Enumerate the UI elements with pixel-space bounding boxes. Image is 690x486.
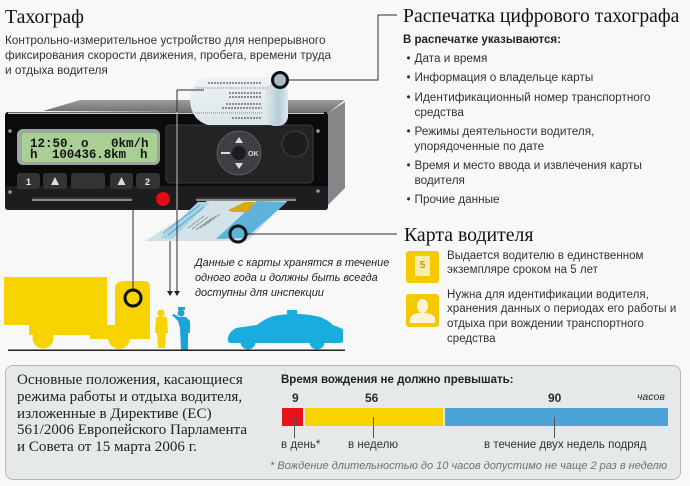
list item: id: [414, 90, 650, 120]
label: per week: в неделю: [348, 439, 398, 451]
panel: printout contents: [403, 34, 650, 206]
callout circles: [125, 72, 288, 306]
police car: [228, 310, 343, 350]
description: tachograph: [5, 33, 332, 77]
regulation text: изложенные в Директиве (ЕС): [17, 406, 212, 422]
heading: driver card: Карта водителя: [404, 224, 534, 246]
driver card text 1: Выдается водителю в единственном: [447, 250, 643, 262]
value 56: 56: [365, 391, 378, 405]
list item: modes: упорядоченные по дате: [414, 140, 544, 152]
blue segment: [445, 408, 668, 426]
paper printout: [190, 77, 288, 126]
list item: date: Дата и время: [414, 52, 487, 65]
note: card data storage: [194, 257, 389, 299]
ground line: [8, 350, 345, 351]
note: card data storage: Данные с карты хранятся в течение: [195, 257, 389, 269]
driver figure: [155, 310, 168, 348]
device screen: 0km/h: [111, 137, 149, 151]
tick: two weeks: [554, 417, 555, 438]
unit: часов: [637, 391, 665, 403]
list item: time and place: водителя: [414, 174, 465, 186]
driver card text 2: [447, 288, 676, 345]
device body: [5, 100, 345, 210]
navigation keypad: [217, 131, 261, 175]
arrowheads: [167, 291, 180, 296]
driver card text 1: экземпляре сроком на 5 лет: [447, 264, 598, 276]
driver card text 2: отдыха при вождении транспортного: [447, 318, 644, 330]
printout subheading: В распечатке указываются:: [403, 34, 561, 46]
list item: id: Идентификационный номер транспортного: [414, 90, 650, 104]
tick: day: [294, 417, 295, 438]
label: per day: в день*: [281, 439, 320, 451]
red segment: [282, 408, 303, 426]
card slots and red light: [32, 192, 170, 206]
callout lines: [133, 15, 397, 291]
round button: [282, 131, 308, 157]
tick: week: [373, 417, 374, 438]
regulation text: 561/2006 Европейского Парламента: [17, 422, 247, 438]
driving time bar: [281, 391, 668, 451]
driver card text 1: [447, 250, 643, 276]
title: tachograph: Тахограф: [5, 6, 84, 28]
device buttons: 2: [145, 177, 150, 187]
description: tachograph: Контрольно-измерительное устройство для непрерывного: [5, 33, 326, 47]
note: card data storage: одного года и должны быть всегда: [195, 272, 378, 284]
note: card data storage: доступны для инспекции: [195, 287, 324, 299]
driver card text 2: средства: [447, 333, 496, 345]
value 90: 90: [548, 391, 561, 405]
device buttons: [17, 173, 160, 189]
list item: id: средства: [414, 106, 464, 118]
device screen: 12:50.: [30, 137, 75, 151]
regulation text: режима работы и отдыха водителя,: [17, 389, 242, 405]
regulation text: [17, 372, 247, 455]
value 9: 9: [292, 391, 299, 405]
description: tachograph: и отдыха водителя: [5, 63, 108, 77]
chart heading: Время вождения не должно превышать:: [281, 374, 514, 386]
list item: other: Прочие данные: [414, 192, 500, 206]
heading: digital printout: Распечатка цифрового тахографа: [403, 5, 679, 27]
list item: time and place: [414, 158, 642, 188]
panel: regulations: [5, 365, 681, 480]
device screen: h: [30, 148, 38, 162]
list item: modes: [414, 124, 594, 154]
driver card: [145, 197, 296, 241]
icon: five year calendar: [406, 251, 439, 283]
truck: [4, 277, 150, 349]
icon: person: [406, 294, 439, 327]
device screen: 100436.8km: [52, 148, 126, 162]
device buttons: 1: [26, 177, 31, 187]
navigation keypad: OK: [248, 151, 258, 158]
device screen: o: [81, 137, 89, 151]
device screen: h: [140, 148, 148, 162]
regulation text: и Совета от 15 марта 2006 г.: [17, 439, 197, 455]
regulation text: Основные положения, касающиеся: [17, 372, 243, 388]
inspector figure: [172, 307, 190, 350]
list item: owner: Информация о владельце карты: [414, 71, 593, 84]
label: two weeks: в течение двух недель подряд: [484, 439, 647, 451]
icon: five year calendar: 5: [420, 260, 425, 271]
description: tachograph: фиксирования скорости движения, пробега, времени труда: [5, 48, 331, 62]
list item: modes: Режимы деятельности водителя,: [414, 124, 594, 138]
list item: time and place: Время и место ввода и извлечения карты: [414, 158, 642, 172]
driver card text 2: хранения данных о периодах его работы и: [447, 303, 676, 315]
driver card text 2: Нужна для идентификации водителя,: [447, 288, 649, 300]
footnote: * Вождение длительностью до 10 часов допустимо не чаще 2 раз в неделю: [270, 460, 667, 472]
device screen: [17, 129, 160, 165]
yellow segment: [305, 408, 443, 426]
